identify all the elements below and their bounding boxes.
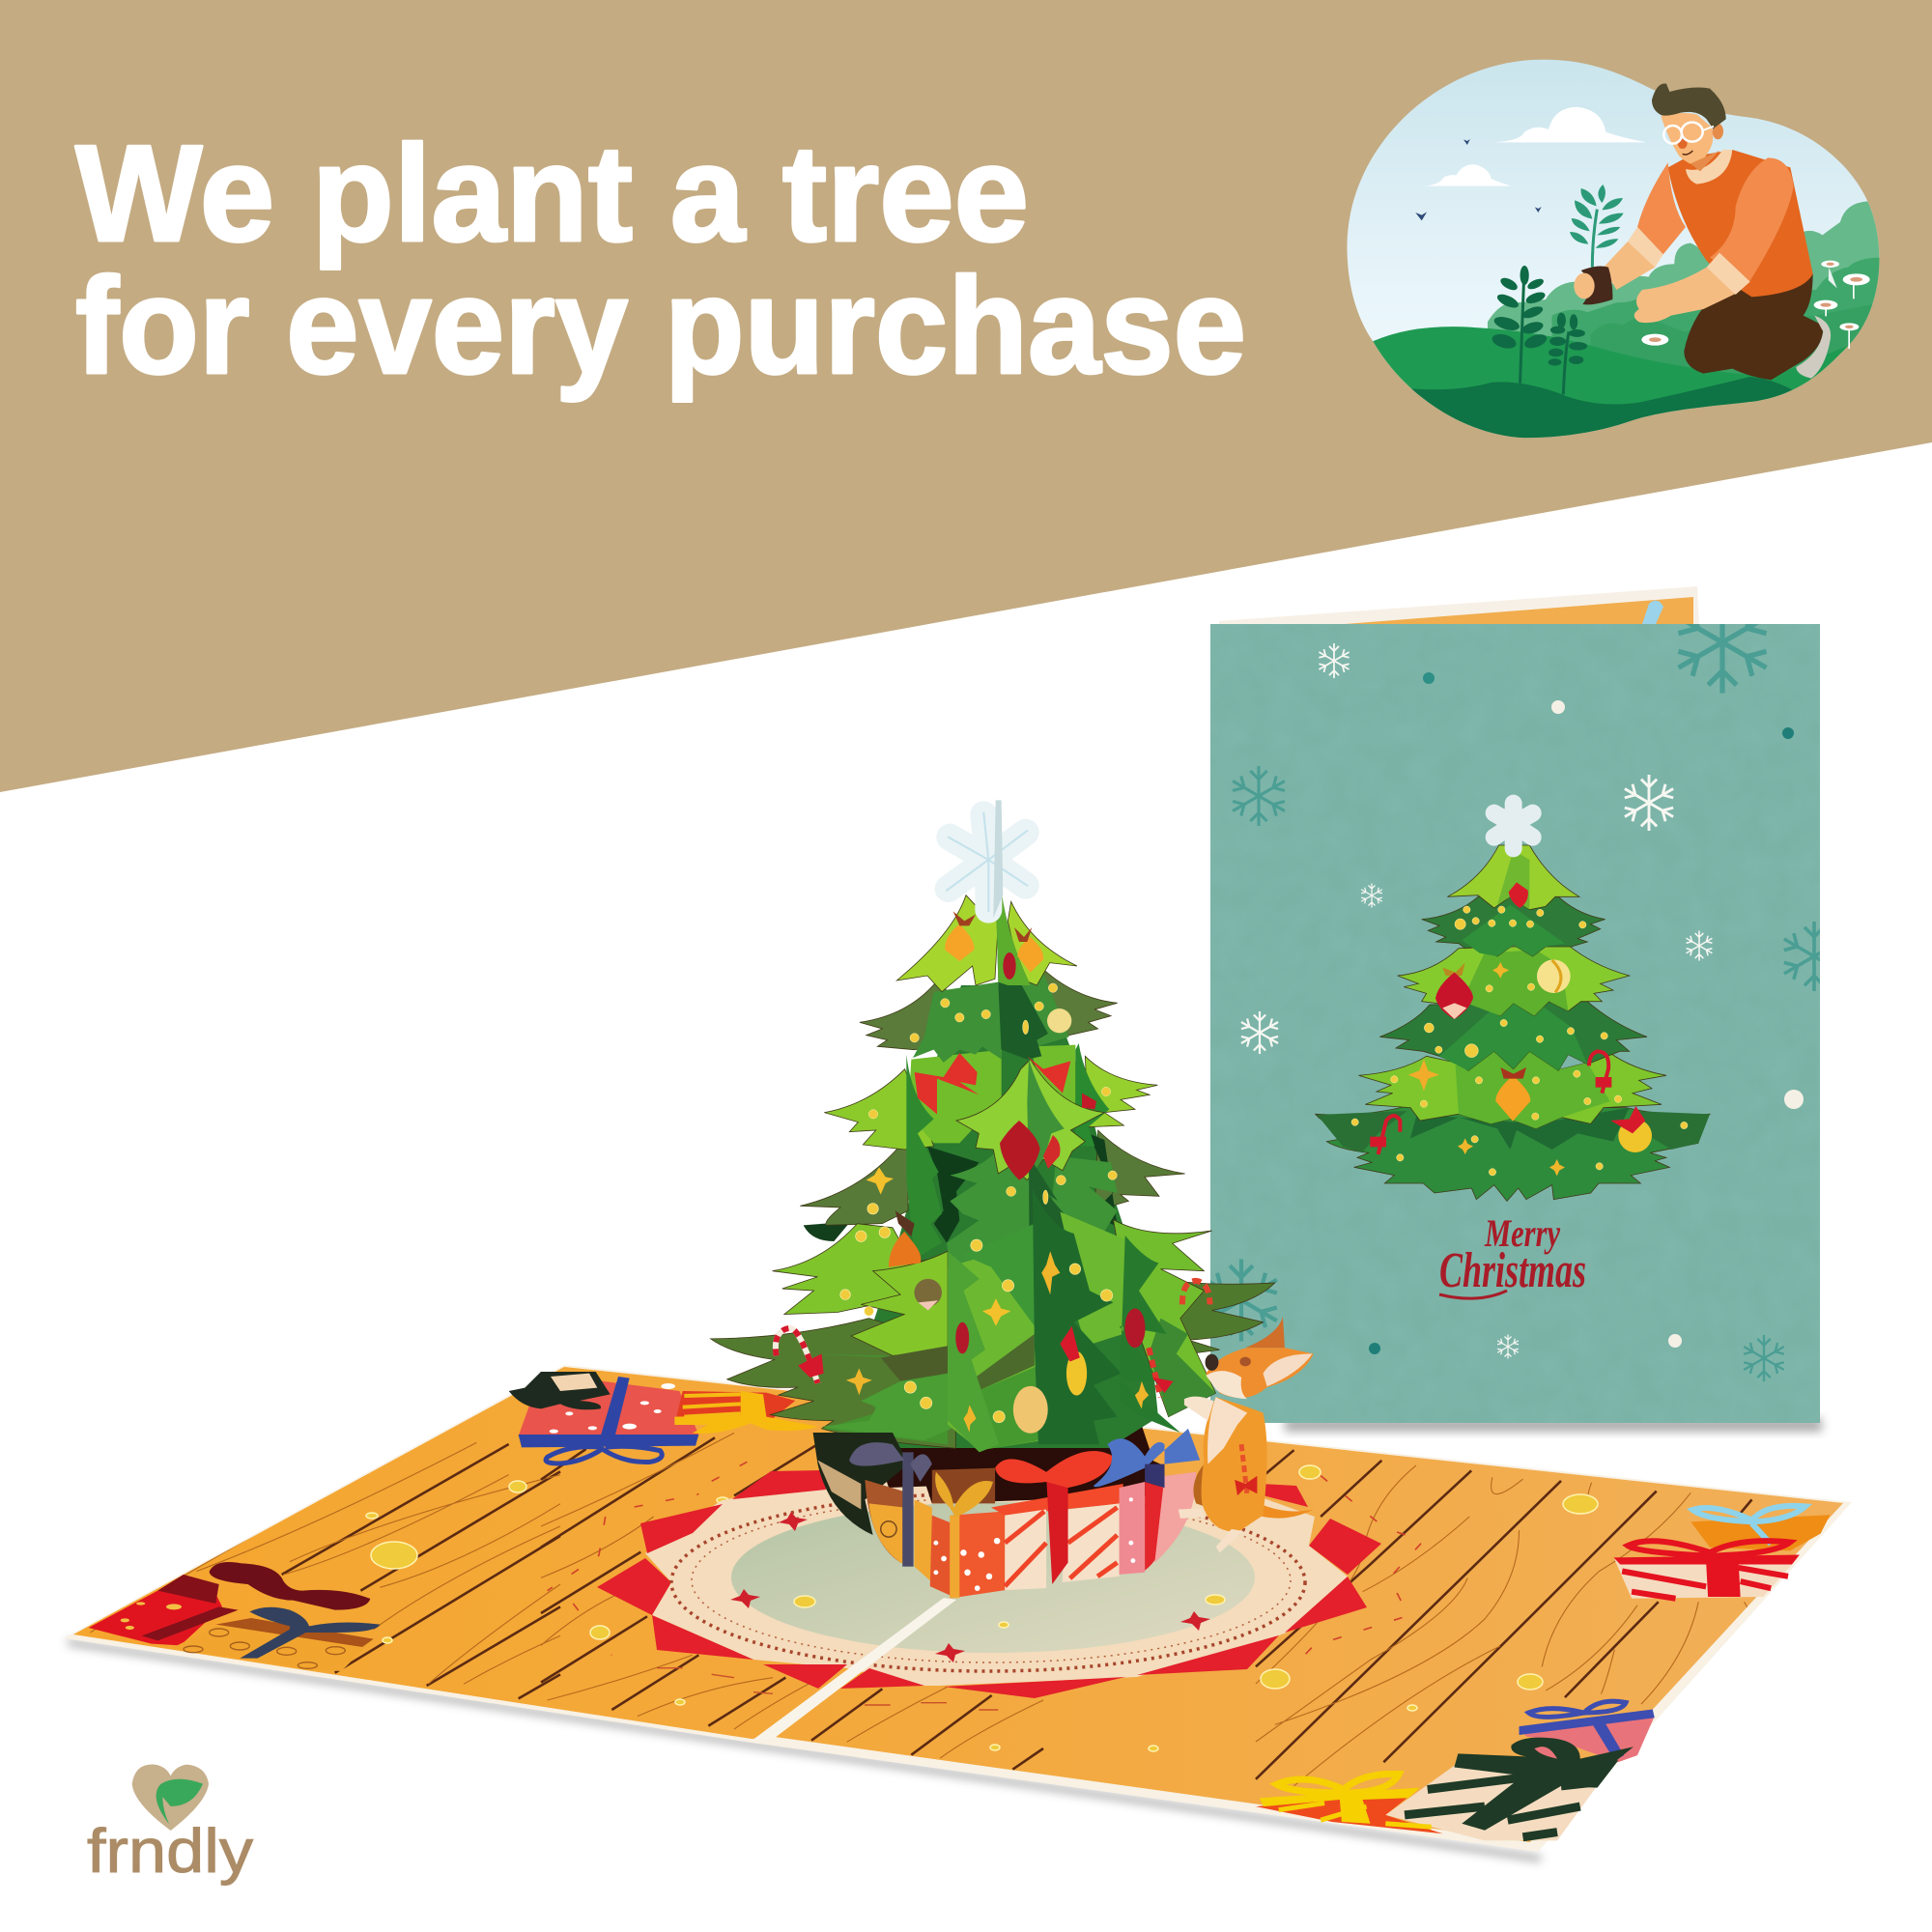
lower green foot bbox=[822, 1374, 952, 1440]
olive tier left bbox=[800, 1140, 908, 1225]
dark front hill bbox=[1388, 377, 1802, 444]
flowers bbox=[1641, 261, 1870, 349]
gift: navy bow box bbox=[849, 1442, 932, 1567]
olive upper tier left bbox=[860, 973, 953, 1050]
dog paw bbox=[1184, 1397, 1214, 1421]
man: sleeves bbox=[1637, 157, 1794, 283]
star fold bbox=[993, 800, 1003, 918]
skirt outer dotted ring bbox=[671, 1493, 1305, 1671]
upper back panel bbox=[913, 982, 1002, 1063]
right fin bbox=[1075, 1043, 1109, 1147]
right fin bbox=[1120, 1236, 1180, 1433]
floor lights bbox=[366, 1465, 1598, 1751]
tree lower lights bbox=[840, 1204, 1113, 1423]
logo heart bbox=[132, 1765, 209, 1831]
dog eye patch bbox=[1239, 1357, 1251, 1366]
gift: right-corner boxes bbox=[1614, 1506, 1830, 1599]
dark base bbox=[813, 1433, 908, 1535]
man: torso bbox=[1668, 150, 1813, 297]
top tier right bbox=[1008, 901, 1077, 985]
logo leaf bbox=[156, 1779, 203, 1824]
dog candy ornaments bbox=[1241, 1444, 1247, 1495]
diagonal tan banner bbox=[0, 0, 1932, 792]
man bbox=[1570, 84, 1870, 380]
central band bbox=[976, 1334, 1035, 1391]
title bbox=[75, 117, 1246, 403]
man: plant pot bbox=[1574, 267, 1612, 304]
tree green backing bbox=[850, 985, 1158, 1448]
bushes bbox=[1488, 201, 1887, 399]
greeting: Merry Christmas bbox=[1439, 1211, 1586, 1298]
man: glasses and smile bbox=[1663, 123, 1714, 155]
card shadow bbox=[1285, 1418, 1822, 1432]
corgi dog bbox=[1179, 1317, 1314, 1552]
olive upper tier right bbox=[1040, 969, 1118, 1036]
gift: red striped box bbox=[991, 1451, 1123, 1590]
clouds bbox=[1423, 107, 1646, 186]
paper texture bbox=[1210, 624, 1820, 1423]
man: arms and hands bbox=[1604, 242, 1736, 323]
dark space under tree bbox=[869, 1420, 1159, 1488]
greeting: Merry Christmas: Christmas bbox=[1439, 1243, 1586, 1298]
tree upper section bbox=[800, 800, 1185, 1294]
gift: top-left red box bbox=[509, 1372, 818, 1463]
skirt inner dotted ring bbox=[692, 1498, 1291, 1662]
seams bbox=[657, 1668, 998, 1710]
right gap bbox=[1089, 1133, 1118, 1227]
dark gap bbox=[927, 1147, 979, 1243]
dots bbox=[1369, 672, 1804, 1354]
tree lights bbox=[868, 983, 1117, 1273]
left fin bbox=[906, 1055, 942, 1259]
man: cuffs and collar bbox=[1628, 150, 1750, 295]
lower left fin bbox=[948, 1251, 999, 1452]
dark fold panel bbox=[1033, 1188, 1122, 1444]
gift: yellow panel bbox=[914, 1499, 932, 1582]
snowflake star bbox=[947, 813, 1027, 911]
dark back shadow tips bbox=[804, 1222, 850, 1241]
dog front leg bbox=[1179, 1508, 1204, 1519]
mid green right bbox=[1043, 1156, 1123, 1294]
left olive base tier bbox=[711, 1319, 955, 1448]
gift: black bow bbox=[509, 1372, 611, 1409]
dog face bbox=[1206, 1371, 1247, 1399]
tree skirt bbox=[597, 1470, 1381, 1698]
tree lower section bbox=[711, 1188, 1314, 1598]
dog chest bbox=[1208, 1397, 1247, 1464]
central dark fold bbox=[997, 892, 1048, 1060]
printed christmas tree bbox=[1316, 804, 1710, 1201]
scene blob bbox=[1336, 51, 1890, 451]
skirt stars bbox=[730, 1512, 1210, 1662]
wooden floor bbox=[73, 1367, 1843, 1842]
dog bow bbox=[1235, 1476, 1257, 1495]
title: for every purchase bbox=[75, 249, 1246, 403]
gift: bottom-left red box bbox=[89, 1562, 380, 1671]
base shadow bbox=[68, 1642, 1541, 1859]
bows and ornaments bbox=[867, 911, 1096, 1294]
right planks bbox=[1256, 1450, 1752, 1786]
card back sheet bbox=[1219, 586, 1699, 628]
man: head bbox=[1661, 113, 1713, 167]
gift: brown interior bbox=[932, 1468, 995, 1503]
greeting: Merry Christmas: Merry bbox=[1484, 1211, 1560, 1255]
olive tier right bbox=[1094, 1130, 1185, 1210]
man: hair bbox=[1652, 84, 1726, 128]
lower cylinder bbox=[978, 1366, 1038, 1450]
dog hind foot bbox=[1216, 1529, 1243, 1552]
right olive base tier bbox=[1160, 1279, 1275, 1357]
front tier fold bbox=[1027, 1060, 1065, 1180]
pop-up christmas tree bbox=[711, 800, 1314, 1598]
wood planks bbox=[90, 1430, 1751, 1786]
green hill bbox=[1350, 327, 1890, 444]
man: neck shadow bbox=[1690, 151, 1719, 171]
young plants bbox=[1490, 266, 1587, 394]
dog ear bbox=[1264, 1353, 1313, 1386]
upper cylinder shade bbox=[963, 1224, 1035, 1326]
tree top snowflake star bbox=[1494, 804, 1533, 848]
olive band bbox=[881, 1346, 948, 1381]
gift: pink box bbox=[1094, 1429, 1200, 1575]
printed ornaments bbox=[1370, 882, 1652, 1176]
gift: dotted orange box bbox=[930, 1472, 1005, 1598]
seedling bbox=[1570, 185, 1624, 268]
left planks far bbox=[90, 1430, 560, 1698]
white snowflakes bbox=[1238, 643, 1715, 1358]
greeting card standing bbox=[1200, 586, 1849, 1432]
front tier bbox=[956, 1060, 1104, 1180]
dog head bbox=[1206, 1348, 1314, 1398]
dark base stripe bbox=[817, 1461, 861, 1510]
dog nose bbox=[1206, 1354, 1218, 1371]
center fold bbox=[752, 1598, 956, 1741]
bright tier right bbox=[1085, 1056, 1157, 1127]
title: We plant a tree bbox=[75, 117, 1029, 270]
gift: front-corner boxes bbox=[1256, 1701, 1655, 1840]
dog tail bbox=[1257, 1503, 1314, 1519]
upper right panel bbox=[1021, 973, 1069, 1046]
man: trousers bbox=[1684, 273, 1823, 380]
skirt lights bbox=[794, 1595, 1225, 1628]
card cover bbox=[1210, 624, 1820, 1423]
bright tier left bbox=[824, 1069, 934, 1150]
skirt cream bbox=[645, 1478, 1348, 1686]
man: ear and nose bbox=[1678, 124, 1723, 149]
inside wood ribbon bbox=[1642, 601, 1663, 624]
base sheet edge bbox=[64, 1365, 1852, 1852]
open pop-up card base bbox=[64, 1365, 1852, 1859]
tree lower ornaments bbox=[776, 1232, 1209, 1434]
bow panel bbox=[908, 1050, 1002, 1143]
interior of gift ring bbox=[916, 1450, 1160, 1503]
central cylinder bbox=[948, 1239, 1042, 1450]
skirt red pieces bbox=[597, 1470, 1381, 1698]
right bright tier bbox=[1113, 1220, 1216, 1417]
birds bbox=[1415, 139, 1542, 220]
lower left green bbox=[810, 1353, 948, 1444]
mid green left bbox=[947, 1152, 1029, 1294]
left bright tier bbox=[773, 1224, 948, 1315]
dog body bbox=[1202, 1397, 1267, 1531]
inside wood strip bbox=[1345, 597, 1693, 624]
illustration: man planting a tree bbox=[1336, 51, 1890, 451]
man: shoe bbox=[1796, 316, 1831, 379]
gift: yellow box bbox=[676, 1391, 795, 1418]
logo: frndly bbox=[87, 1765, 253, 1886]
right small panel bbox=[1149, 1319, 1216, 1417]
right panel bbox=[1060, 1211, 1125, 1346]
top fold highlight bbox=[997, 892, 1031, 985]
tree lights bbox=[1351, 906, 1688, 1176]
left planks near bbox=[541, 1433, 1043, 1770]
dark front fold bbox=[1029, 1156, 1075, 1294]
right upper panel bbox=[1031, 1045, 1075, 1104]
lower bright panel bbox=[851, 1251, 948, 1355]
teal snowflakes bbox=[1200, 591, 1849, 1381]
dog back ear bbox=[1245, 1317, 1285, 1348]
logo wordmark: frndly bbox=[87, 1816, 253, 1886]
dog rear bbox=[1193, 1464, 1208, 1507]
top tier left bbox=[896, 895, 998, 992]
skirt sage centre bbox=[731, 1502, 1255, 1653]
